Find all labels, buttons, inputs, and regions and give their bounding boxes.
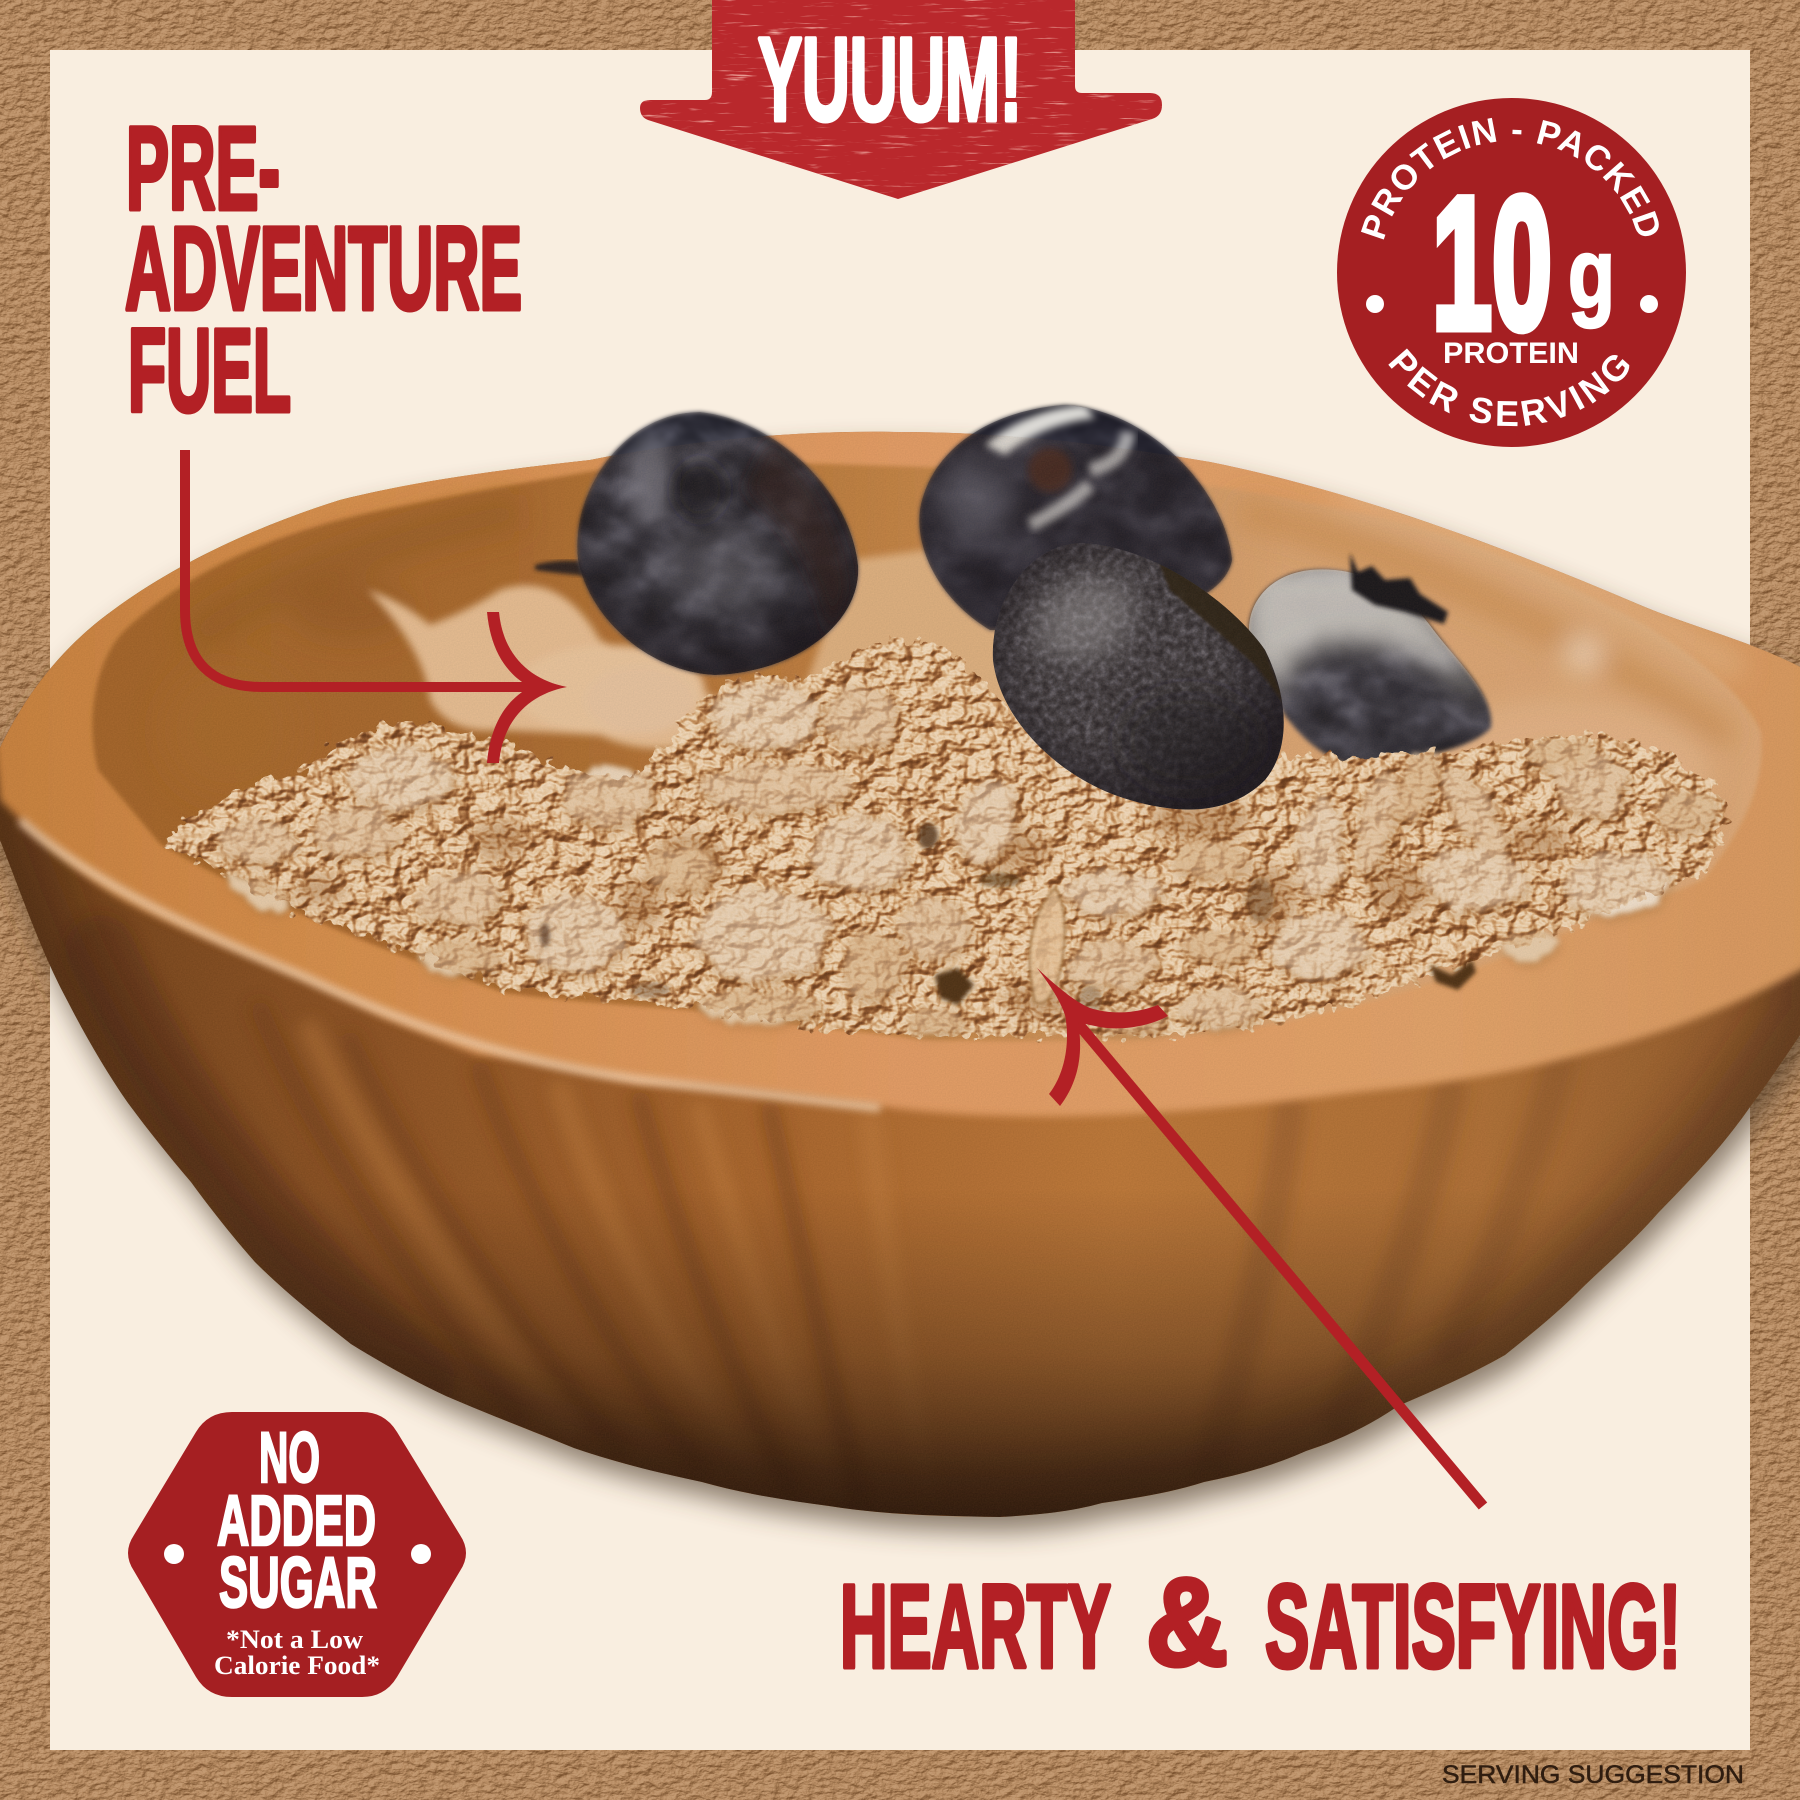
hexagon text: ADDED — [217, 1482, 376, 1561]
bowl drop shadow — [0, 447, 1800, 1532]
disclaimer: Calorie Food* — [214, 1651, 380, 1680]
arc text: protein packed: PROTEIN - PACKED — [1361, 118, 1659, 240]
oat surface texture — [160, 639, 1726, 1036]
badge arc path lower — [1358, 272, 1665, 426]
badge: 10g protein — [1337, 98, 1686, 447]
oat crevices — [540, 823, 1476, 1014]
oat shadows between clumps — [294, 766, 1570, 1016]
heading: pre-adventure fuel — [125, 103, 522, 437]
bowl rim — [0, 420, 1800, 1116]
photo: wooden bowl of oatmeal with blueberries — [0, 400, 1800, 1530]
disclaimer — [214, 1625, 380, 1680]
heading: pre-adventure fuel: PRE- — [126, 103, 280, 235]
disclaimer: *Not a Low — [226, 1625, 363, 1654]
heading: hearty and satisfying: & — [1146, 1554, 1228, 1692]
stem tail — [535, 561, 590, 576]
berry: left — [535, 412, 858, 675]
oat lumps — [222, 684, 1716, 1033]
banner distress — [640, 0, 1162, 199]
bowl edge shading — [0, 780, 1800, 1502]
hexagon text: SUGAR — [219, 1544, 377, 1623]
badge arc path upper — [1380, 141, 1643, 272]
badge: no added sugar — [128, 1412, 466, 1697]
fruit body — [993, 543, 1284, 810]
berry crown — [1350, 553, 1448, 624]
fruit shading — [577, 412, 858, 675]
banner shape — [640, 0, 1162, 199]
hexagon text: NO — [259, 1419, 320, 1498]
arrow: to oats from hearty and satisfying — [1037, 968, 1483, 1506]
fruit shading — [900, 400, 1240, 640]
banner arrow: yuuum — [640, 0, 1162, 199]
rim highlight — [20, 820, 880, 1108]
unit g: g — [1568, 218, 1615, 328]
interior shading — [160, 490, 1740, 840]
heading: pre-adventure fuel: FUEL — [128, 305, 291, 437]
oat mass — [160, 639, 1726, 1036]
footnote: serving suggestion: SERVING SUGGESTION — [1442, 1761, 1744, 1789]
fruit body — [919, 405, 1232, 630]
berry: front — [993, 543, 1285, 810]
arc text: per serving: PER SERVING — [1388, 348, 1630, 426]
berry: right with crown — [1240, 553, 1491, 765]
fruit body — [577, 412, 858, 675]
badge dot right — [1640, 295, 1658, 313]
big number 10: 10 — [1432, 158, 1552, 368]
curled oat flake — [1030, 888, 1065, 1003]
badge dot left — [1366, 295, 1384, 313]
heading: hearty and satisfying — [840, 1554, 1681, 1693]
oatmeal — [160, 639, 1726, 1036]
hexagon dot right — [411, 1544, 431, 1564]
bowl film grain — [0, 420, 1800, 1530]
fruit shading — [993, 543, 1285, 810]
heading: pre-adventure fuel: ADVENTURE — [125, 203, 522, 335]
blurred oats behind — [368, 540, 1020, 760]
badge circle — [1337, 98, 1686, 447]
berry: back — [900, 400, 1240, 640]
hexagon dot left — [164, 1544, 184, 1564]
fruit body — [1249, 569, 1491, 765]
protein label: PROTEIN — [1443, 337, 1579, 370]
hexagon text — [217, 1419, 377, 1623]
heading: hearty and satisfying: HEARTY — [840, 1561, 1111, 1693]
wood grain streaks — [100, 950, 1560, 1500]
banner text: YUUUM! — [758, 14, 1022, 146]
bowl base shading — [250, 1214, 1630, 1517]
bowl interior — [92, 463, 1762, 1041]
bowl outer body — [0, 420, 1800, 1530]
wooden bowl — [0, 420, 1800, 1530]
arrow: to oats from pre-adventure fuel — [185, 450, 567, 763]
hexagon — [128, 1412, 466, 1697]
frosty bloom — [1240, 560, 1490, 710]
